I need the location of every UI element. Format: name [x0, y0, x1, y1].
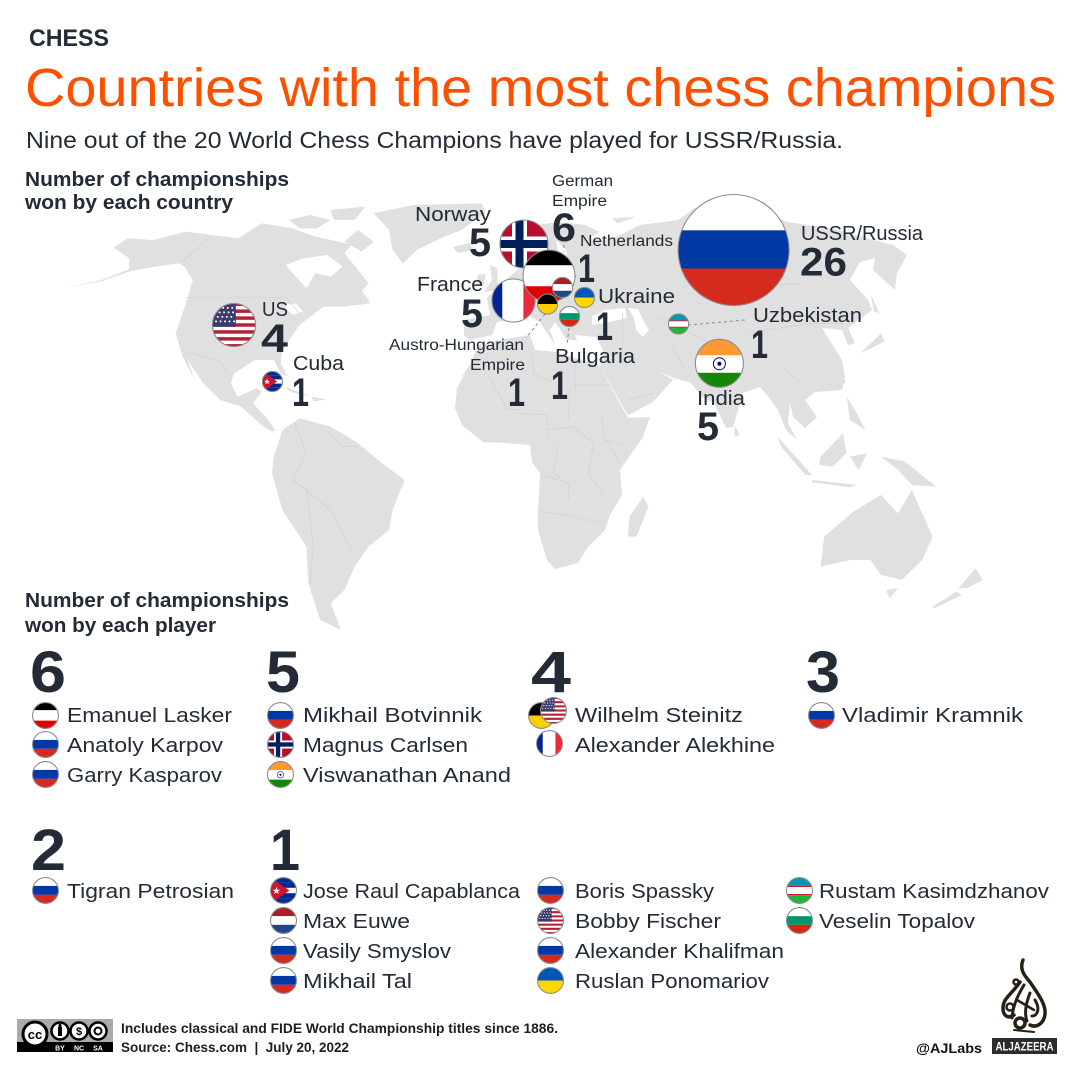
group: 3 titles: Vladimir Kramnik	[842, 705, 1024, 727]
heading: players section: won by each player	[24, 615, 216, 637]
group: 2 titles: Tigran Petrosian	[67, 881, 234, 903]
heading: map section	[24, 169, 289, 214]
group: 1 title: 1	[270, 818, 300, 883]
icon: Creative Commons badge: NC	[74, 1046, 84, 1052]
bubble: France	[491, 278, 536, 323]
bubble: Austro-Hungarian Empire	[537, 294, 558, 314]
map: Eurasia	[464, 200, 907, 440]
icon: Creative Commons badge: cc	[28, 1027, 42, 1042]
label: Cuba 1: Cuba	[293, 353, 345, 375]
group: 6 titles: Garry Kasparov	[67, 765, 222, 787]
map: Africa	[455, 335, 650, 569]
group: 1 title: Boris Spassky	[575, 881, 714, 903]
group: 5 titles: Viswanathan Anand	[303, 765, 511, 787]
label: India 5: India	[697, 388, 746, 410]
label: Netherlands 1	[578, 233, 673, 291]
group: 6 titles: Anatoly Karpov	[67, 735, 223, 757]
group: 1 title: Vasily Smyslov	[303, 941, 451, 963]
label: Netherlands 1: Netherlands	[580, 233, 673, 250]
map: Britain, Ireland, Iceland	[453, 243, 498, 292]
label: US 4: US	[262, 299, 288, 321]
label: US 4: 4	[261, 317, 289, 361]
bubble: Uzbekistan	[668, 314, 689, 334]
label: Bulgaria 1: 1	[551, 364, 568, 408]
group: 6 titles: Emanuel Lasker	[67, 705, 232, 727]
group: 5 titles	[266, 640, 511, 788]
label: Norway 5: 5	[469, 221, 491, 265]
label: France 5: France	[417, 274, 483, 296]
group: 5 titles: Magnus Carlsen	[303, 735, 468, 757]
label: Austro-Hungarian Empire 1	[389, 337, 525, 415]
label: German Empire 6: 6	[552, 206, 576, 250]
group: 1 title: Ruslan Ponomariov	[575, 971, 769, 993]
logo: Al Jazeera wordmark: ALJAZEERA	[996, 1042, 1054, 1054]
heading: players section: Number of championships	[25, 590, 289, 612]
bubble: Norway	[499, 219, 549, 269]
label: German Empire 6: Empire	[552, 193, 607, 210]
group: 6 titles	[30, 640, 232, 788]
label: Austro-Hungarian Empire 1: 1	[508, 371, 525, 415]
label: Uzbekistan 1	[751, 305, 862, 367]
heading: map section: won by each country	[24, 192, 234, 214]
label: Bulgaria 1: Bulgaria	[555, 346, 636, 368]
group: 4 titles: Alexander Alekhine	[575, 735, 775, 757]
footnote and source	[121, 1021, 558, 1055]
label: Norway 5: Norway	[415, 204, 491, 226]
label: Ukraine 1: 1	[596, 305, 613, 349]
logo: Al Jazeera calligraphic drop	[1003, 960, 1045, 1032]
bubble: Ukraine	[574, 287, 595, 308]
group: 4 titles: Wilhelm Steinitz	[575, 705, 743, 727]
bubble: Netherlands	[552, 277, 573, 298]
group: 2 titles	[31, 818, 234, 904]
heading: section label: CHESS	[29, 25, 109, 52]
bubble: German Empire	[522, 249, 576, 303]
group: 4 titles: 4	[531, 640, 571, 705]
label: India 5: 5	[697, 405, 719, 449]
label: Uzbekistan 1: Uzbekistan	[753, 305, 862, 327]
label: Ukraine 1	[596, 286, 675, 349]
footnote and source: Includes classical and FIDE World Championship titles since 1886.	[121, 1021, 558, 1036]
group: 1 title: Jose Raul Capablanca	[303, 881, 521, 903]
label: India 5	[697, 388, 746, 449]
subtitle: Nine out of the 20 World Chess Champions have played for USSR/Russia.	[26, 127, 843, 153]
bubble: USSR/Russia	[676, 192, 791, 308]
group: 5 titles: Mikhail Botvinnik	[303, 705, 483, 727]
leader lines	[526, 245, 745, 345]
label: Austro-Hungarian Empire 1: Empire	[470, 357, 525, 374]
group: 1 title	[270, 818, 1049, 994]
label: US 4	[261, 299, 289, 361]
bubble: Bulgaria	[559, 306, 580, 327]
group: 5 titles: 5	[266, 640, 300, 705]
group: 1 title: Alexander Khalifman	[575, 941, 784, 963]
label: USSR/Russia 26: USSR/Russia	[801, 223, 924, 245]
label: Norway 5	[415, 204, 491, 265]
label: France 5	[417, 274, 483, 336]
group: 1 title: Veselin Topalov	[819, 911, 975, 933]
icon: Creative Commons badge	[17, 1019, 113, 1052]
label: Austro-Hungarian Empire 1: Austro-Hungarian	[389, 337, 524, 354]
heading: players section	[24, 590, 289, 637]
label: USSR/Russia 26: 26	[800, 240, 847, 284]
group: 4 titles	[528, 640, 775, 757]
heading: map section: Number of championships	[25, 169, 289, 191]
logo: Al Jazeera wordmark	[992, 1038, 1057, 1054]
bubble: US	[212, 302, 256, 348]
group: 6 titles: 6	[30, 640, 66, 705]
group: 2 titles: 2	[31, 818, 66, 883]
map: Asia-Pacific and islands	[612, 217, 983, 608]
label: Ukraine 1: Ukraine	[598, 286, 675, 308]
label: France 5: 5	[461, 292, 483, 336]
icon: Creative Commons badge: BY	[55, 1046, 65, 1052]
label: Bulgaria 1	[551, 346, 636, 408]
label: Cuba 1	[292, 353, 345, 415]
bubble: India	[694, 338, 744, 388]
icon: Creative Commons badge: $	[76, 1026, 82, 1038]
group: 1 title: Bobby Fischer	[575, 911, 721, 933]
label: German Empire 6: German	[552, 173, 613, 190]
label: Cuba 1: 1	[292, 371, 309, 415]
label: Uzbekistan 1: 1	[751, 323, 768, 367]
group: 1 title: Mikhail Tal	[303, 971, 412, 993]
map: Americas	[65, 203, 486, 630]
group: 3 titles	[806, 640, 1024, 729]
group: 1 title: Max Euwe	[303, 911, 410, 933]
label: USSR/Russia 26	[800, 223, 924, 284]
credit: AJLabs: @AJLabs	[916, 1041, 982, 1056]
label: Netherlands 1: 1	[578, 247, 595, 291]
title: Countries with the most chess champions	[25, 58, 1056, 118]
bubble: Cuba	[262, 371, 283, 392]
label: German Empire 6	[552, 173, 613, 250]
map: African borders	[462, 350, 653, 523]
group: 3 titles: 3	[806, 640, 840, 705]
world map	[65, 200, 983, 630]
footnote and source: Source: Chess.com | July 20, 2022	[121, 1040, 349, 1055]
icon: Creative Commons badge: SA	[93, 1046, 103, 1052]
group: 1 title: Rustam Kasimdzhanov	[819, 881, 1049, 903]
